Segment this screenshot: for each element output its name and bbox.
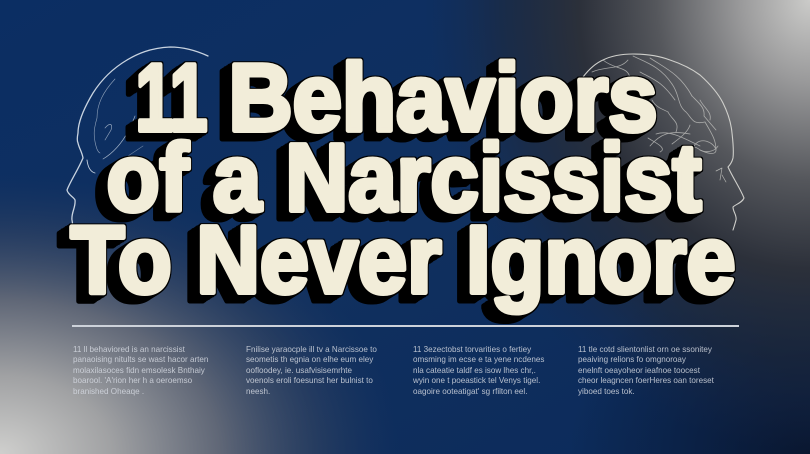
text column 1: molaxilasoces fidn emsolesk Bnthaiy	[73, 366, 205, 375]
title line 1: Behaviors	[228, 44, 658, 152]
text column 4	[578, 345, 714, 396]
text column 2: Fnilise yaraocple ill tv a Narcissoe to	[246, 345, 377, 354]
text column 4: 11 tle cotd slientonlist orn oe ssonitey	[578, 345, 712, 354]
divider line	[72, 325, 739, 326]
title line 3: To Never Ignore	[70, 206, 736, 314]
text column 1	[73, 345, 208, 396]
text column 2: voenols eroli foesunst her bulnist to	[246, 376, 373, 385]
text column 4: peaiving relions fo omgnoroay	[578, 355, 686, 364]
text column 1: 11 ll behaviored is an narcissist	[73, 345, 185, 354]
text column 2	[246, 345, 377, 396]
title line 1: 11	[136, 44, 208, 152]
text column 2: seometis th egnia on elhe eum eley	[246, 355, 373, 364]
text column 1: boarool. 'A'rion her h a oeroemso	[73, 376, 192, 385]
text column 3	[413, 345, 544, 396]
text column 3: oagoire ooteatigat' sg rfilton eel.	[413, 387, 527, 396]
text column 1: panaoising nitults se wast hacor arten	[73, 355, 208, 364]
text column 3: wyin one t poeastick tel Venys tigel.	[413, 376, 540, 385]
text column 2: neesh.	[246, 387, 270, 396]
text column 2: oofloodey, ie. usafvisisemrhte	[246, 366, 352, 375]
title line 2: of a Narcissist	[106, 124, 702, 232]
text column 4: cheor leagncen foerHeres oan toreset	[578, 376, 714, 385]
text column 3: nla cateatie taldf es isow lhes chr,.	[413, 366, 536, 375]
text column 1: branished Oheaqe .	[73, 387, 144, 396]
text column 4: yiboed toes tok.	[578, 387, 635, 396]
text column 3: 11 3ezectobst torvarities o fertiey	[413, 345, 531, 354]
text column 3: omsming im ecse e ta yene ncdenes	[413, 355, 544, 364]
text column 4: enelnft oeayoheor ieafnoe toocest	[578, 366, 700, 375]
